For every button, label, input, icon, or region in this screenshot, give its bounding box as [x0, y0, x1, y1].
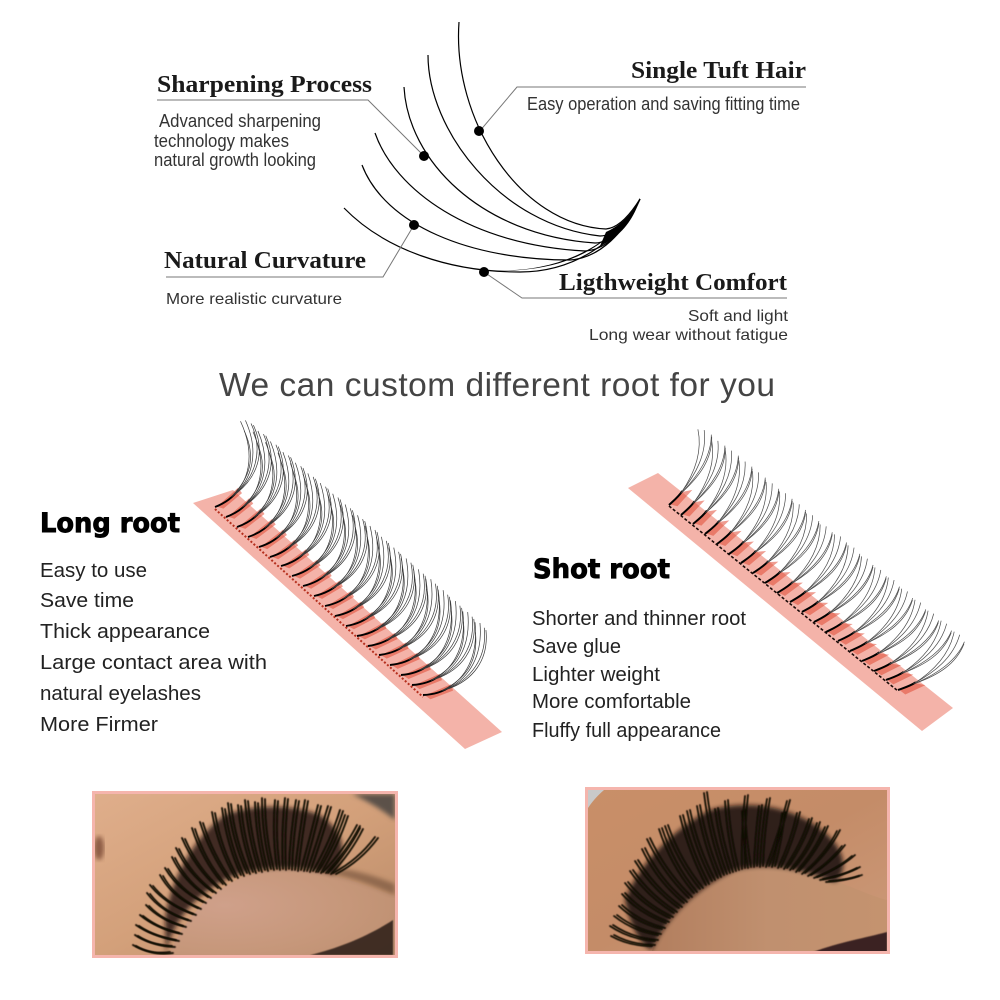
pink frame: [92, 791, 398, 958]
photo: long root lashes on eye: [92, 791, 398, 958]
callout: sharpening process: natural growth looking: [154, 150, 316, 170]
list: short root benefits: Fluffy full appearance: [532, 720, 721, 742]
heading: long root: Long root: [40, 508, 180, 539]
heading: short root: Shot root: [533, 554, 670, 585]
list: long root benefits: [40, 560, 267, 736]
text block: long root: [40, 508, 267, 736]
list: short root benefits: [532, 608, 746, 742]
skin: [95, 794, 395, 955]
lash mass: [625, 805, 843, 950]
photo: short root lashes on eye: [585, 787, 890, 955]
callout: single tuft hair: Easy operation and saving fitting time: [527, 94, 800, 114]
section heading: We can custom different root for you: [219, 367, 775, 404]
callout: sharpening process: technology makes: [154, 131, 289, 151]
lash mass: [165, 807, 342, 955]
callout: lightweight comfort: Soft and light: [688, 308, 789, 325]
lash tufts: [655, 427, 966, 704]
callout: sharpening process: Sharpening Process: [157, 72, 372, 98]
callout: lightweight comfort: Long wear without fatigue: [589, 327, 788, 344]
skin: [588, 790, 887, 951]
list: short root benefits: Lighter weight: [532, 664, 660, 686]
lower lashes: [310, 920, 393, 955]
lash anatomy diagram: [154, 22, 806, 344]
text block: short root: [532, 554, 746, 742]
pink strip: [628, 473, 953, 731]
callout: natural curvature: More realistic curvature: [166, 291, 342, 308]
callout: natural curvature: [164, 248, 366, 308]
lash strip: short root: [628, 427, 966, 731]
list: long root benefits: natural eyelashes: [40, 683, 201, 705]
callout: sharpening process: Advanced sharpening: [159, 111, 321, 131]
lash hairs: [613, 792, 862, 945]
eyelid: [182, 870, 388, 955]
list: short root benefits: More comfortable: [532, 691, 691, 713]
pink strip: [193, 490, 502, 749]
list: long root benefits: Save time: [40, 590, 134, 612]
lash strip: long root: [193, 419, 502, 749]
eyebrow shadow: [813, 932, 887, 952]
callout dots and leader lines: [157, 87, 806, 298]
callout: sharpening process: [154, 72, 372, 170]
base dotted line: [215, 509, 423, 697]
lash hairs: [133, 798, 375, 953]
second layer of hairs: [610, 793, 859, 946]
eyelid: [652, 875, 887, 951]
callout: single tuft hair: [527, 58, 806, 114]
list: short root benefits: Save glue: [532, 636, 621, 658]
curved lash hairs: [344, 22, 640, 272]
list: long root benefits: Large contact area with: [40, 652, 267, 674]
callout: single tuft hair: Single Tuft Hair: [631, 58, 806, 84]
list: long root benefits: More Firmer: [40, 714, 158, 736]
lash tufts: [201, 419, 489, 706]
base dotted line: [669, 506, 898, 691]
list: long root benefits: Thick appearance: [40, 621, 210, 643]
callout: natural curvature: Natural Curvature: [164, 248, 366, 274]
pink frame: [585, 787, 890, 954]
list: long root benefits: Easy to use: [40, 560, 147, 582]
second layer of hairs: [136, 799, 378, 954]
callout: lightweight comfort: Ligthweight Comfort: [559, 270, 787, 296]
list: short root benefits: Shorter and thinner root: [532, 608, 746, 630]
callout: lightweight comfort: [559, 270, 789, 344]
